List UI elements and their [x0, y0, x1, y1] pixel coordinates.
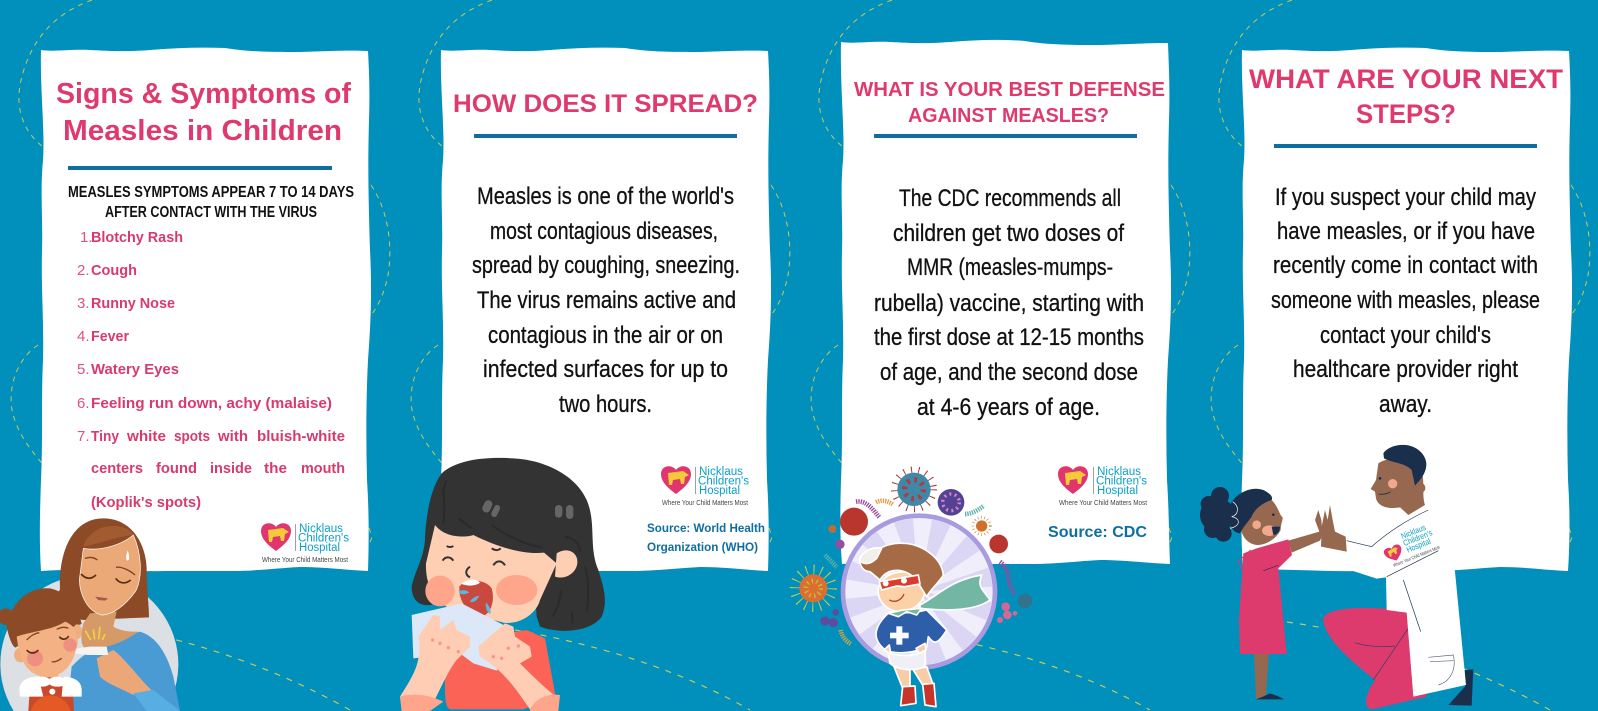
subheading [68, 184, 354, 221]
symptom list: 6. [77, 395, 90, 412]
symptom list: 7. [77, 428, 90, 445]
body text: rubella) vaccine, starting with [874, 290, 1144, 317]
coat logo: Where Your Child Matters Most [1392, 544, 1441, 568]
symptom list: Runny Nose [91, 295, 175, 312]
body text: away. [1379, 391, 1432, 418]
hospital logo [661, 466, 749, 507]
body text: the first dose at 12-15 months [874, 324, 1144, 351]
title: WHAT ARE YOUR NEXT [1249, 64, 1564, 94]
symptom list: bluish-white [257, 428, 345, 445]
hospital logo: Children's [298, 532, 349, 544]
superhero child [859, 543, 990, 707]
body text: contact your child's [1320, 322, 1491, 349]
symptom list: found [156, 460, 197, 477]
hospital logo: Where Your Child Matters Most [262, 557, 348, 564]
body text: of age, and the second dose [880, 359, 1138, 386]
body text: have measles, or if you have [1277, 218, 1535, 245]
body text: Measles is one of the world's [477, 183, 734, 210]
symptom list: 4. [77, 328, 90, 345]
title: WHAT IS YOUR BEST DEFENSE [854, 79, 1165, 101]
symptom list: Tiny [91, 428, 120, 445]
viruses [795, 470, 1032, 644]
body text: children get two doses of [893, 220, 1124, 247]
coat logo: Hospital [1405, 536, 1432, 555]
body text: at 4-6 years of age. [917, 394, 1100, 421]
coat logo: Children's [1402, 527, 1434, 548]
card background [440, 48, 771, 571]
symptom list: Fever [91, 328, 129, 345]
source: Source: CDC [1048, 524, 1147, 541]
symptom list: Watery Eyes [91, 361, 179, 378]
symptom list: the [264, 460, 287, 477]
hospital logo: Nicklaus [699, 466, 743, 478]
hospital logo: Hospital [299, 542, 340, 554]
hospital logo [261, 523, 349, 564]
symptom list: mouth [301, 460, 345, 477]
body text [874, 185, 1144, 421]
symptom list: spots [174, 428, 210, 445]
symptom list: centers [91, 460, 143, 477]
hospital logo: Where Your Child Matters Most [662, 500, 748, 507]
source: Organization (WHO) [647, 540, 758, 554]
body text: spread by coughing, sneezing. [472, 252, 740, 279]
hospital logo [1058, 466, 1147, 507]
symptom list: inside [210, 460, 252, 477]
symptom list: (Koplik's spots) [91, 494, 201, 511]
card background [840, 40, 1171, 564]
subheading: MEASLES SYMPTOMS APPEAR 7 TO 14 DAYS [68, 184, 354, 201]
doctor [1321, 445, 1473, 709]
illustration: superhero child and viruses [795, 470, 1032, 707]
body text: If you suspect your child may [1275, 184, 1536, 211]
panel: signs and symptoms [40, 48, 371, 571]
hospital logo: Where Your Child Matters Most [1059, 500, 1147, 507]
purple ring badge [843, 516, 995, 668]
symptom list: Blotchy Rash [91, 229, 183, 246]
body text: someone with measles, please [1271, 287, 1540, 314]
body text [472, 183, 740, 418]
illustration: doctor high-fiving girl [1200, 445, 1473, 709]
title [854, 79, 1165, 127]
subheading: AFTER CONTACT WITH THE VIRUS [105, 204, 317, 221]
body text: MMR (measles-mumps- [907, 254, 1113, 281]
hospital logo: Nicklaus [299, 523, 343, 535]
title: HOW DOES IT SPREAD? [453, 90, 758, 118]
illustration: girl sneezing [400, 458, 605, 711]
title: Signs & Symptoms of [56, 78, 351, 110]
girl [1200, 487, 1323, 699]
symptom list: 2. [77, 262, 90, 279]
body text [1271, 184, 1540, 418]
body text: The CDC recommends all [899, 185, 1121, 212]
body text: two hours. [559, 391, 652, 418]
body text: infected surfaces for up to [483, 356, 728, 383]
body text: recently come in contact with [1273, 252, 1538, 279]
panel: best defense [840, 40, 1171, 564]
symptom list: with [217, 428, 248, 445]
panel: how does it spread [440, 48, 771, 571]
body text: contagious in the air or on [488, 322, 723, 349]
title: AGAINST MEASLES? [908, 105, 1109, 127]
card background [1241, 48, 1572, 571]
hospital logo: Children's [1096, 476, 1147, 488]
body text: healthcare provider right [1293, 356, 1518, 383]
symptom list: Feeling run down, achy (malaise) [91, 395, 332, 412]
body text: most contagious diseases, [490, 218, 718, 245]
symptom list: 1. [80, 229, 93, 246]
hospital logo: Hospital [1097, 485, 1138, 497]
illustration: mother and sick child [0, 518, 180, 711]
title: Measles in Children [63, 115, 342, 147]
symptom list: 5. [77, 361, 90, 378]
source [647, 521, 765, 554]
coat logo: Nicklaus [1399, 522, 1427, 541]
symptom list [77, 229, 345, 511]
panel: next steps [1241, 48, 1572, 571]
symptom list: Cough [91, 262, 137, 279]
title: STEPS? [1356, 99, 1456, 129]
hospital logo: Nicklaus [1097, 466, 1141, 478]
symptom list: white [126, 428, 166, 445]
title [56, 78, 351, 147]
title [1249, 64, 1564, 129]
hospital logo: Hospital [699, 485, 740, 497]
card background [40, 48, 371, 571]
source: Source: World Health [647, 521, 765, 535]
symptom list: 3. [77, 295, 90, 312]
body text: The virus remains active and [477, 287, 736, 314]
coat logo [1379, 520, 1441, 569]
hospital logo: Children's [698, 476, 749, 488]
